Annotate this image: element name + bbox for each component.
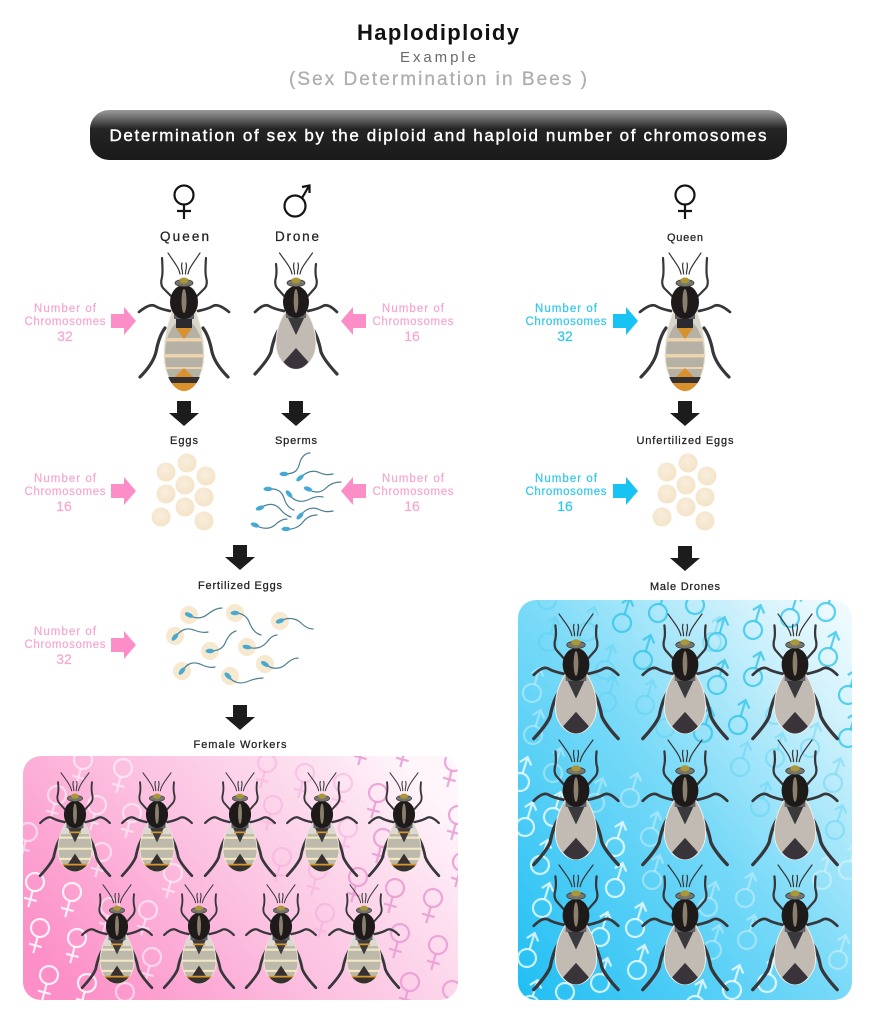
callout: drone chromosomes 16: Chromosomes: [372, 316, 454, 328]
callout: right queen chromosomes 32: Chromosomes: [526, 316, 607, 328]
callout: fertilized eggs chromosomes 32: Chromosomes: [24, 639, 106, 651]
label: queen: Queen: [160, 229, 209, 244]
callout: queen chromosomes 32: [24, 303, 106, 344]
arrow: pink drone: [341, 307, 366, 335]
callout: right queen chromosomes 32: Number of: [535, 303, 598, 315]
callout: fertilized eggs chromosomes 32: Number of: [34, 626, 97, 638]
label: drone: Drone: [275, 229, 319, 244]
icon: eggs: [152, 454, 216, 530]
callout: unfertilized eggs chromosomes 16: Number of: [535, 473, 598, 485]
callout: eggs chromosomes 16: 16: [56, 498, 72, 514]
arrow: pink sperms: [341, 477, 366, 505]
arrow: queen to eggs: [169, 401, 199, 426]
label: male drones: Male Drones: [650, 581, 720, 593]
icon: right queen bee: [640, 253, 730, 392]
icon: unfertilized eggs: [652, 454, 716, 530]
subtitle: example: Example: [400, 49, 476, 66]
callout: drone chromosomes 16: 16: [404, 328, 420, 344]
callout: sperms chromosomes 16: [372, 473, 454, 514]
label: right queen: Queen: [667, 232, 703, 244]
arrow: drone to sperms: [281, 401, 311, 426]
arrow: pink eggs: [111, 477, 136, 505]
icon: queen bee: [139, 253, 229, 392]
callout: right queen chromosomes 32: 32: [557, 328, 573, 344]
arrow: pink fertilized eggs: [111, 631, 136, 659]
callout: unfertilized eggs chromosomes 16: 16: [557, 498, 573, 514]
callout: sperms chromosomes 16: Chromosomes: [372, 486, 454, 498]
icon: fertilized eggs: [166, 604, 313, 685]
label: female workers: Female Workers: [194, 739, 287, 751]
arrow: to fertilized eggs: [225, 545, 255, 570]
label: eggs: Eggs: [170, 435, 198, 447]
callout: drone chromosomes 16: Number of: [382, 303, 445, 315]
title: Haplodiploidy: [357, 20, 520, 45]
callout: queen chromosomes 32: Chromosomes: [24, 316, 106, 328]
icon: drone bee: [255, 253, 337, 374]
drone bees: [534, 614, 837, 990]
arrow: to male drones: [670, 546, 700, 571]
callout: drone chromosomes 16: [372, 303, 454, 344]
arrow: blue queen: [613, 307, 638, 335]
callout: eggs chromosomes 16: Chromosomes: [24, 486, 106, 498]
label: unfertilized eggs: Unfertilized Eggs: [636, 435, 734, 447]
arrow: pink queen: [111, 307, 136, 335]
callout: sperms chromosomes 16: Number of: [382, 473, 445, 485]
callout: queen chromosomes 32: Number of: [34, 303, 97, 315]
callout: fertilized eggs chromosomes 32: [24, 626, 106, 667]
worker bees: [40, 773, 439, 988]
banner: determination of sex: [90, 110, 787, 160]
icon: sperms: [250, 453, 341, 531]
banner: determination of sex: Determination of sex by the diploid and haploid number of chromosomes: [110, 126, 766, 145]
panel: female workers: [23, 756, 458, 1000]
callout: right queen chromosomes 32: [526, 303, 607, 344]
callout: eggs chromosomes 16: [24, 473, 106, 514]
callout: unfertilized eggs chromosomes 16: Chromosomes: [526, 486, 607, 498]
arrow: blue eggs: [613, 477, 638, 505]
subtitle: sex determination in bees: (Sex Determination in Bees ): [289, 69, 587, 90]
label: sperms: Sperms: [275, 435, 318, 447]
callout: sperms chromosomes 16: 16: [404, 498, 420, 514]
icon: male symbol drone: [284, 186, 310, 216]
arrow: queen to unfertilized eggs: [670, 401, 700, 426]
icon: female symbol queen: [174, 186, 194, 219]
callout: eggs chromosomes 16: Number of: [34, 473, 97, 485]
label: fertilized eggs: Fertilized Eggs: [198, 580, 282, 592]
callout: queen chromosomes 32: 32: [57, 328, 73, 344]
arrow: to female workers: [225, 705, 255, 730]
callout: unfertilized eggs chromosomes 16: [526, 473, 607, 514]
panel: male drones: [518, 600, 852, 1000]
callout: fertilized eggs chromosomes 32: 32: [56, 651, 72, 667]
icon: female symbol right queen: [676, 186, 694, 219]
